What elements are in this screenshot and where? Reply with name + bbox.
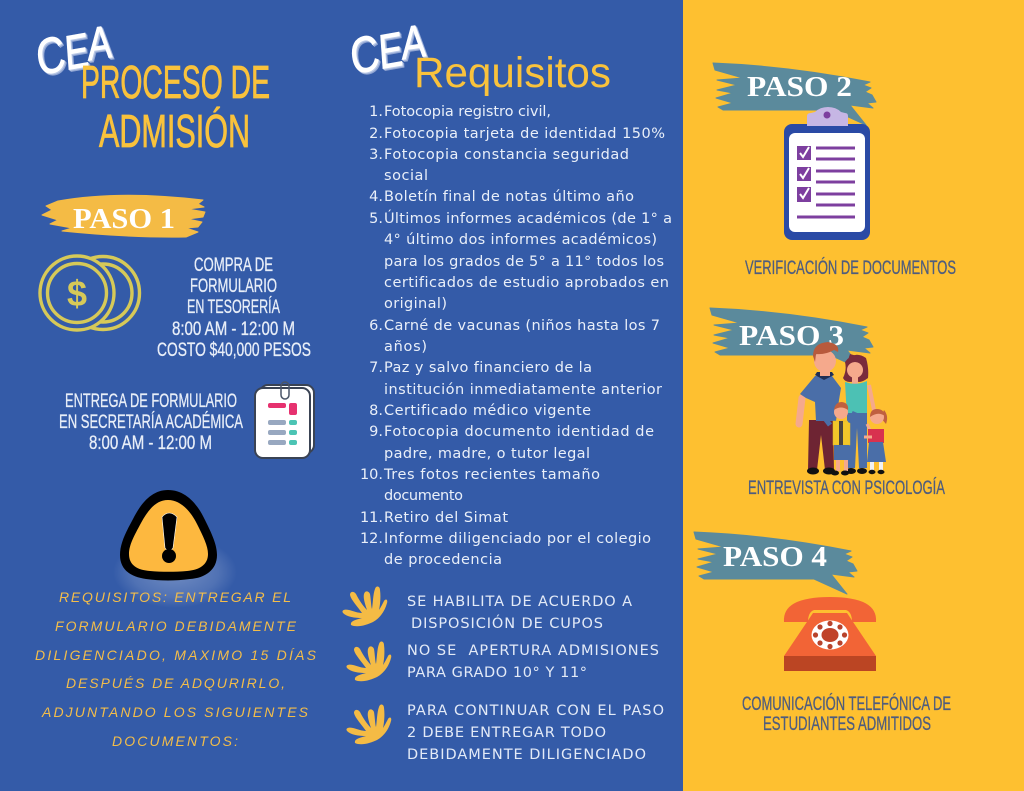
text block: compra de formulario: COMPRA DE [194,254,273,276]
list: numbered requirements: social [384,168,428,184]
text block: warning requirements: DILIGENCIADO, MAXIMO 15 DÍAS [35,647,317,663]
text block: note continuar: 2 DEBE ENTREGAR TODO [407,725,606,741]
logo: CEA left: E [63,23,90,81]
icon: coins [40,256,140,330]
list: numbered requirements: para los grados de 5° a 11° todos los [384,254,664,270]
text block: note cupos [407,594,632,632]
badge: paso 3 [710,308,873,370]
list: numbered requirements: Fotocopia constancia seguridad [384,147,629,163]
boy [834,405,848,419]
text block: entrega de formulario: ENTREGA DE FORMULARIO [65,390,237,412]
man [799,398,802,424]
text block: entrega de formulario [59,390,243,454]
badge: paso 1: PASO 1 [73,203,175,235]
list: numbered requirements: 11. [360,510,383,526]
text block: note grados [407,643,659,681]
text block: note continuar [407,703,664,763]
text block: note cupos: SE HABILITA DE ACUERDO A [407,594,632,610]
list: numbered requirements: 5. [369,211,383,227]
text block: warning requirements: ADJUNTANDO LOS SIGUIENTES [41,704,309,720]
woman [843,355,868,382]
list: numbered requirements: Boletín final de notas último año [384,189,634,205]
list: numbered requirements: 6. [369,318,383,334]
icon: warning sign [113,490,237,608]
list: numbered requirements: Certificado médico vigente [384,403,591,419]
logo: CEA center [347,14,427,86]
list: numbered requirements: Fotocopia documento identidad de [384,424,654,440]
logo: CEA left: C [33,24,69,87]
caption: comunicacion: ESTUDIANTES ADMITIDOS [763,713,931,735]
text block: compra de formulario: 8:00 AM - 12:00 M [172,318,295,340]
list: numbered requirements: 4. [369,189,383,205]
list: numbered requirements: de procedencia [384,552,502,568]
text block: note continuar: DEBIDAMENTE DILIGENCIADO [407,747,646,763]
icon: hand 2 [346,641,391,681]
badge: paso 1 [42,195,205,237]
list: numbered requirements: Carné de vacunas (niños hasta los 7 [384,318,660,334]
text block: compra de formulario [157,254,311,361]
text block: warning requirements: DESPUÉS DE ADQURIRLO, [66,675,285,691]
background: blue panels [0,0,683,791]
logo: CEA left [33,15,113,87]
text block: warning requirements: FORMULARIO DEBIDAMENTE [55,618,297,634]
icon: hand 1 [342,586,387,626]
text block: warning requirements [35,589,317,749]
list: numbered requirements: institución inmediatamente anterior [384,382,662,398]
icon: coins: $ [67,273,87,314]
caption: comunicacion [742,692,951,735]
list: numbered requirements: 3. [369,147,383,163]
text block: warning requirements: REQUISITOS: ENTREGAR EL [59,589,291,605]
text block: compra de formulario: FORMULARIO [190,275,277,297]
badge: paso 2 [713,63,876,125]
list: numbered requirements: 7. [369,360,383,376]
icon: hand 3 [346,704,391,744]
list: numbered requirements: documento [384,488,463,504]
panel: yellow steps column [683,0,1024,791]
badge: paso 4 [694,532,857,594]
text block: compra de formulario: COSTO $40,000 PESOS [157,339,311,361]
list: numbered requirements: 12. [360,531,383,547]
list: numbered requirements: 8. [369,403,383,419]
list: numbered requirements: Últimos informes académicos (de 1° a [384,209,672,227]
badge: paso 4: PASO 4 [723,541,827,573]
list: numbered requirements: años) [384,339,427,355]
text block: entrega de formulario: EN SECRETARÍA ACADÉMICA [59,410,243,433]
logo: CEA center: A [401,14,427,69]
illustration: family [799,342,887,476]
logo: CEA left: A [87,15,113,70]
text block: compra de formulario: EN TESORERÍA [187,295,280,318]
list: numbered requirements: padre, madre, o tutor legal [384,446,590,462]
list: numbered requirements: 2. [369,126,383,142]
title: proceso de admision [81,56,270,157]
title: proceso de admision: PROCESO DE [81,56,270,108]
list: numbered requirements: Informe diligenciado por el colegio [384,531,651,547]
heading: requisitos: Requisitos [414,49,611,97]
text block: note grados: PARA GRADO 10° Y 11° [407,665,587,681]
text block: warning requirements: DOCUMENTOS: [112,733,238,749]
text block: note continuar: PARA CONTINUAR CON EL PASO [407,703,664,719]
logo: CEA center: C [347,23,383,86]
badge: paso 3: PASO 3 [739,320,844,352]
icon: telephone [784,597,876,671]
icon: document sheets [255,382,314,458]
logo: CEA center: E [377,22,404,80]
text block: entrega de formulario: 8:00 AM - 12:00 M [89,432,212,454]
list: numbered requirements: 10. [360,467,383,483]
list: numbered requirements: original) [384,296,447,312]
list: numbered requirements: certificados de estudio aprobados en [384,275,669,291]
badge: paso 2: PASO 2 [747,71,852,103]
list: numbered requirements: Fotocopia registro civil, [384,104,551,120]
list: numbered requirements: 1. [369,104,383,120]
icon: clipboard checklist [784,107,870,240]
list: numbered requirements: 9. [369,424,383,440]
list: numbered requirements: Tres fotos recientes tamaño [383,467,600,483]
list: numbered requirements [360,104,672,568]
list: numbered requirements: Retiro del Simat [384,510,508,526]
list: numbered requirements: 4° último dos informes académicos) [384,232,657,248]
list: numbered requirements: Paz y salvo financiero de la [384,360,592,376]
title: proceso de admision: ADMISIÓN [99,105,250,157]
girl [881,410,887,424]
text block: note grados: NO SE APERTURA ADMISIONES [407,643,659,659]
list: numbered requirements: Fotocopia tarjeta de identidad 150% [384,126,665,142]
text block: note cupos: DISPOSICIÓN DE CUPOS [411,614,603,632]
